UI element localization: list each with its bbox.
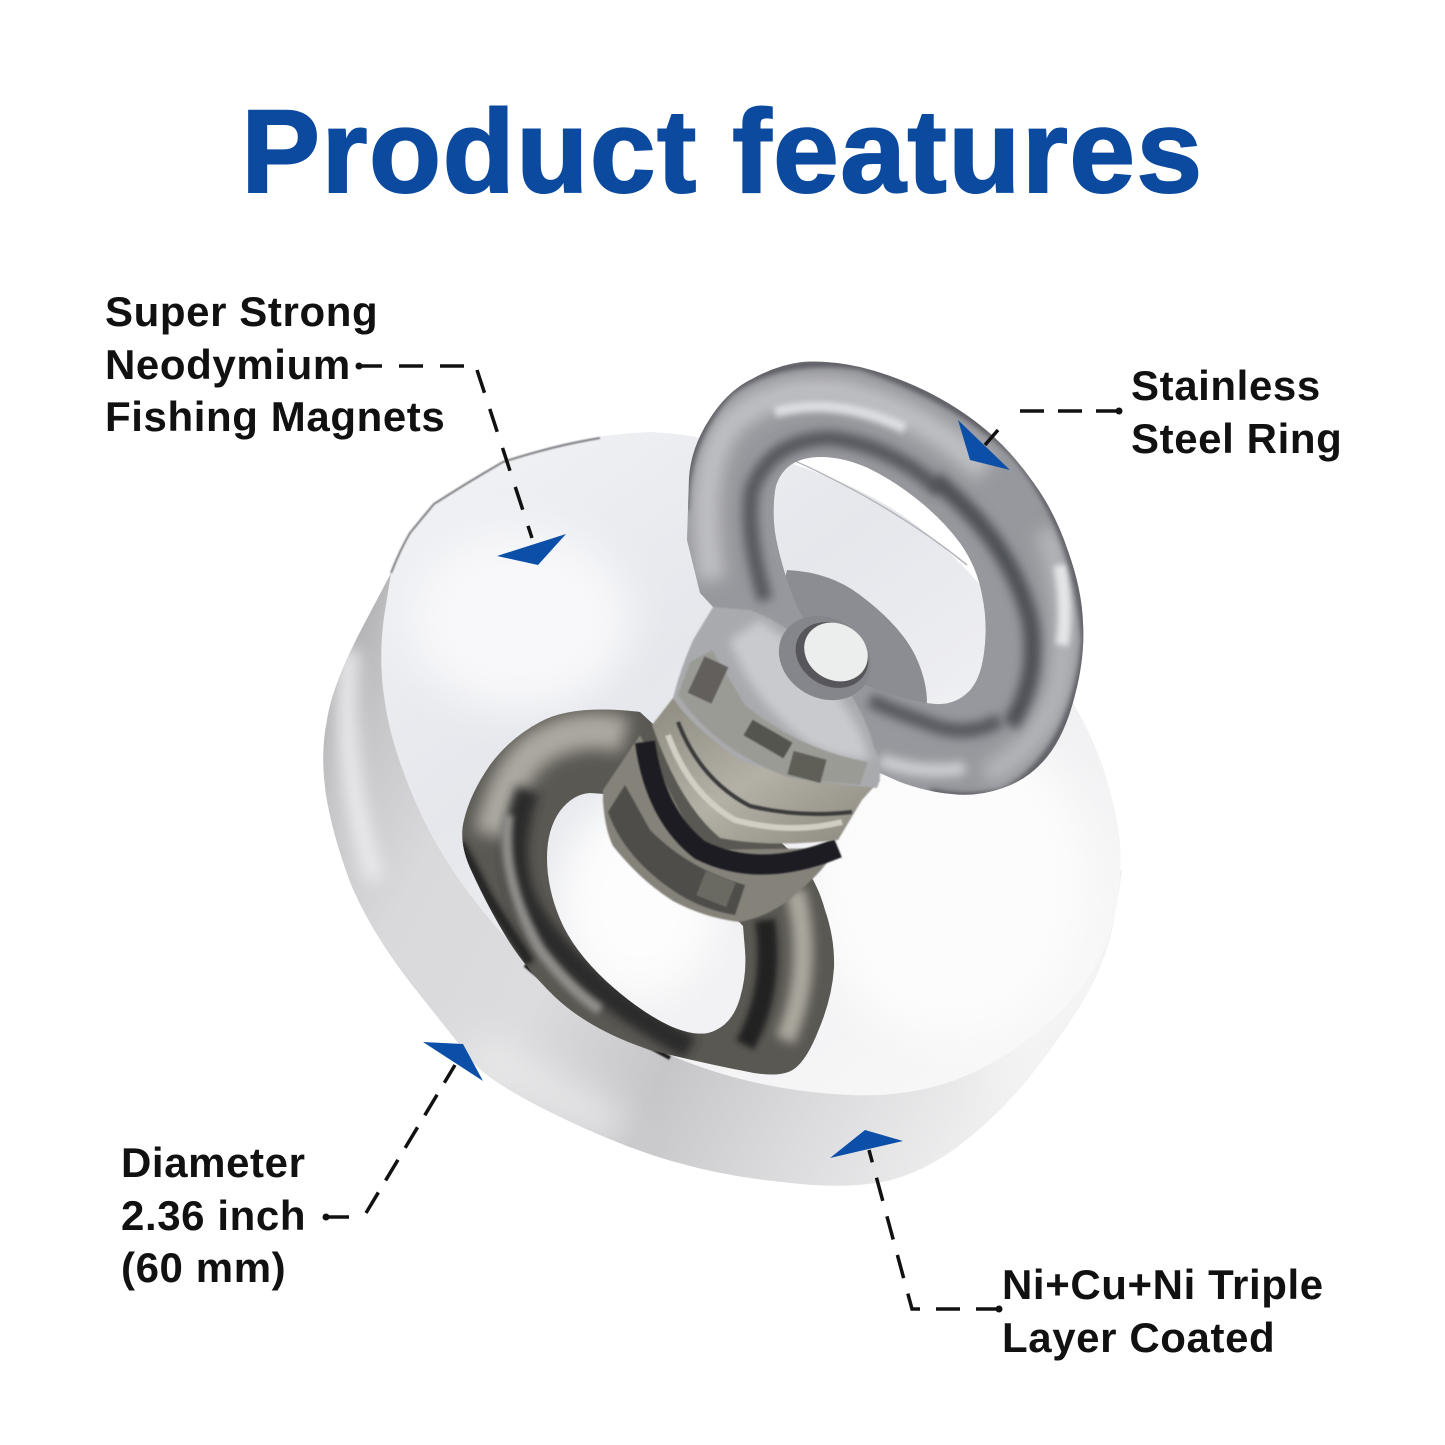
eye bolt boss — [673, 607, 880, 788]
product photo and callout arrows — [322, 362, 1122, 1312]
label: neodymium magnets: Fishing Magnets — [105, 393, 445, 440]
ring highlights — [706, 391, 985, 580]
label: neodymium magnets: Super Strong — [105, 288, 378, 335]
threaded neck — [652, 698, 880, 844]
ring dark inner band — [750, 438, 940, 600]
title: Product features — [241, 86, 1204, 218]
lower collar reflection — [603, 735, 838, 922]
label: coating — [1002, 1261, 1324, 1360]
lower eye bolt reflection — [462, 710, 834, 1074]
magnet top face — [381, 432, 1120, 1095]
ring dark outer edge — [685, 363, 1085, 796]
label: coating: Layer Coated — [1002, 1314, 1275, 1360]
arrow: diameter callout — [322, 1042, 483, 1220]
engraved band — [678, 650, 868, 785]
label: steel ring: Stainless — [1131, 362, 1321, 409]
magnet body side wall — [323, 573, 1122, 1186]
rim dark reflections — [525, 965, 670, 1058]
label: diameter — [121, 1139, 306, 1291]
label: diameter: (60 mm) — [121, 1244, 286, 1291]
label: diameter: Diameter — [121, 1139, 306, 1186]
label: steel ring — [1131, 362, 1342, 462]
label: neodymium magnets — [105, 288, 445, 440]
arrow: neodymium callout — [356, 362, 566, 565]
steel washer behind ring — [780, 570, 927, 703]
label: steel ring: Steel Ring — [1131, 414, 1342, 462]
arrow: coating callout — [830, 1130, 1002, 1312]
label: neodymium magnets: Neodymium — [105, 340, 351, 388]
arrow: steel ring callout — [958, 408, 1122, 470]
label: coating: Ni+Cu+Ni Triple — [1002, 1261, 1324, 1308]
ring bolt head — [763, 599, 887, 717]
stainless steel ring — [687, 362, 1084, 795]
label: diameter: 2.36 inch — [121, 1192, 306, 1238]
